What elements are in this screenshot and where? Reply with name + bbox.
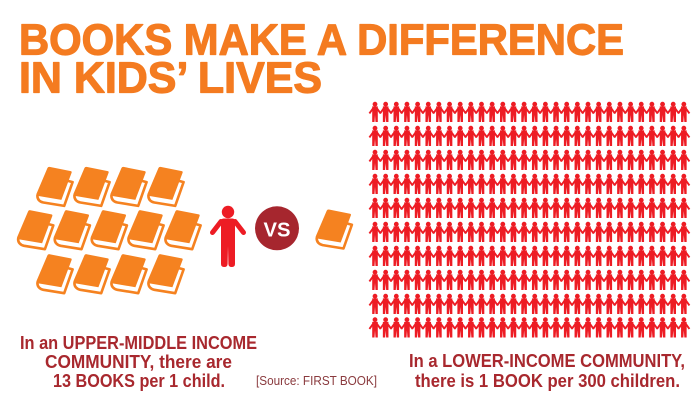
vs badge: VS	[264, 218, 290, 242]
icon group: 300 children	[369, 102, 689, 338]
source note: [Source: FIRST BOOK]	[256, 373, 377, 388]
vs badge	[255, 206, 299, 250]
icon: single book	[316, 209, 352, 248]
icon group: 13 books	[17, 167, 201, 293]
title: BOOKS MAKE A DIFFERENCE	[19, 16, 624, 64]
caption: upper-middle income: In an UPPER-MIDDLE INCOME	[20, 333, 257, 353]
caption: lower income: there is 1 BOOK per 300 children.	[415, 371, 680, 391]
title	[19, 16, 624, 102]
caption: upper-middle income	[20, 333, 257, 391]
icon: single child	[212, 206, 244, 267]
title: IN KIDS’ LIVES	[19, 54, 322, 102]
caption: upper-middle income: 13 BOOKS per 1 child.	[53, 371, 225, 391]
caption: lower income	[409, 351, 685, 391]
caption: upper-middle income: COMMUNITY, there are	[45, 352, 232, 372]
